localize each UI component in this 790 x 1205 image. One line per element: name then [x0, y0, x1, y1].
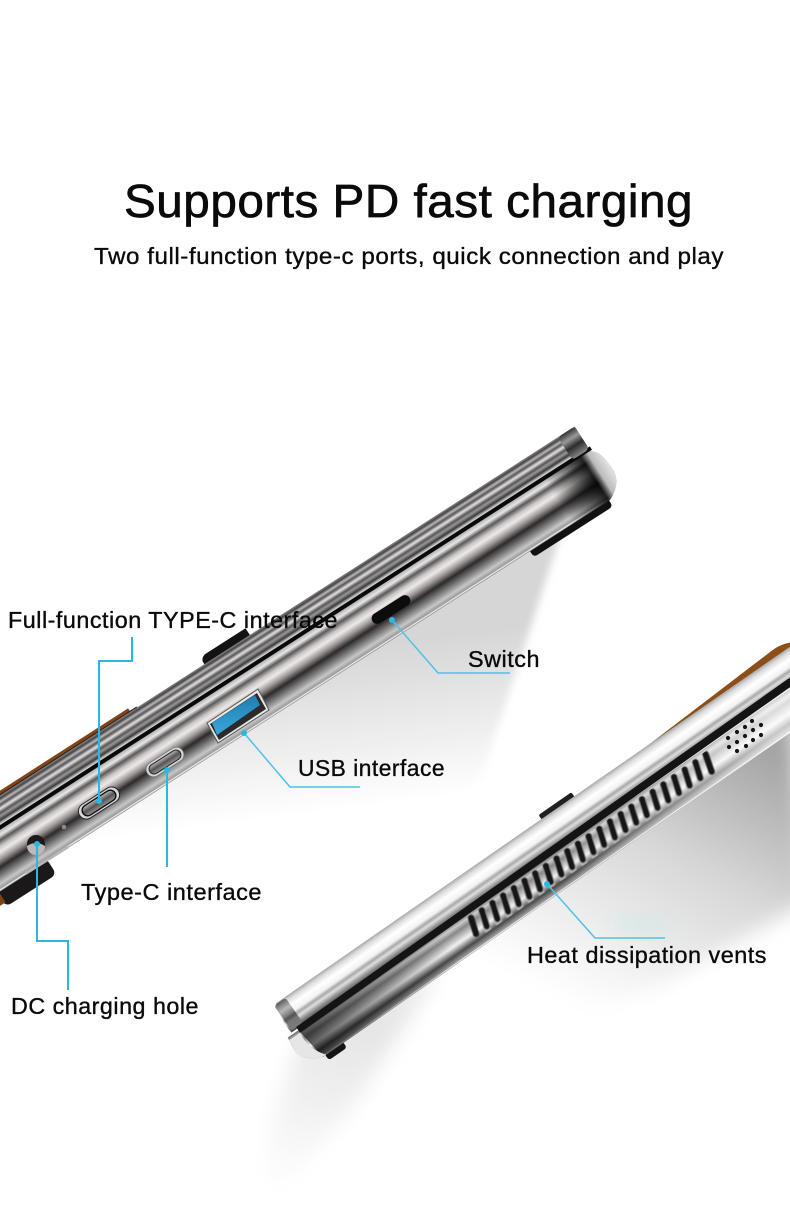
speaker holes	[726, 719, 763, 753]
indicator light	[62, 825, 66, 829]
lid end detail	[274, 998, 303, 1030]
shadow beneath upper device	[60, 530, 562, 900]
full-function Type-C port	[75, 784, 123, 822]
USB port	[207, 689, 269, 743]
hinge slit	[293, 654, 790, 1033]
callout: Type-C: Type-C interface	[81, 879, 262, 905]
callout: switch: Switch	[468, 646, 540, 672]
callout: full-function Type-C	[8, 607, 338, 804]
callout: switch	[389, 617, 540, 673]
callout: USB	[241, 730, 445, 787]
base body	[0, 444, 626, 916]
title: Supports PD fast charging	[124, 175, 693, 227]
rear feet and leather cover	[0, 426, 618, 929]
base shading	[298, 919, 479, 1060]
callout: heat vents: Heat dissipation vents	[527, 942, 767, 968]
Type-C port	[143, 744, 187, 780]
lid stack	[0, 426, 589, 871]
upper device: side view with ports	[0, 415, 635, 929]
lid corner hinge	[558, 426, 589, 460]
subtitle: Two full-function type-c ports, quick connection and play	[94, 243, 724, 269]
base left cap	[288, 1028, 326, 1068]
base seam near DC port	[25, 846, 69, 875]
base body	[286, 663, 790, 1068]
callout: USB: USB interface	[298, 755, 445, 781]
heat vents	[466, 754, 717, 936]
callout: DC charging: DC charging hole	[11, 993, 199, 1019]
callout: Type-C	[81, 767, 262, 905]
lower device: side view with vents	[262, 628, 790, 1073]
hinge slit	[0, 446, 592, 872]
base end cap	[543, 444, 626, 524]
switch slot	[370, 593, 412, 626]
callout: heat vents	[527, 881, 767, 968]
lid stack	[272, 634, 790, 1033]
leather cover and feet	[281, 637, 790, 1060]
callout: full-function Type-C: Full-function TYPE-C interface	[8, 607, 338, 633]
right end highlight	[549, 663, 790, 886]
callout: DC charging	[11, 841, 199, 1019]
DC charging hole	[27, 835, 45, 855]
teal glow behind vents label	[610, 916, 670, 936]
shadow beneath lower device	[265, 700, 790, 1205]
